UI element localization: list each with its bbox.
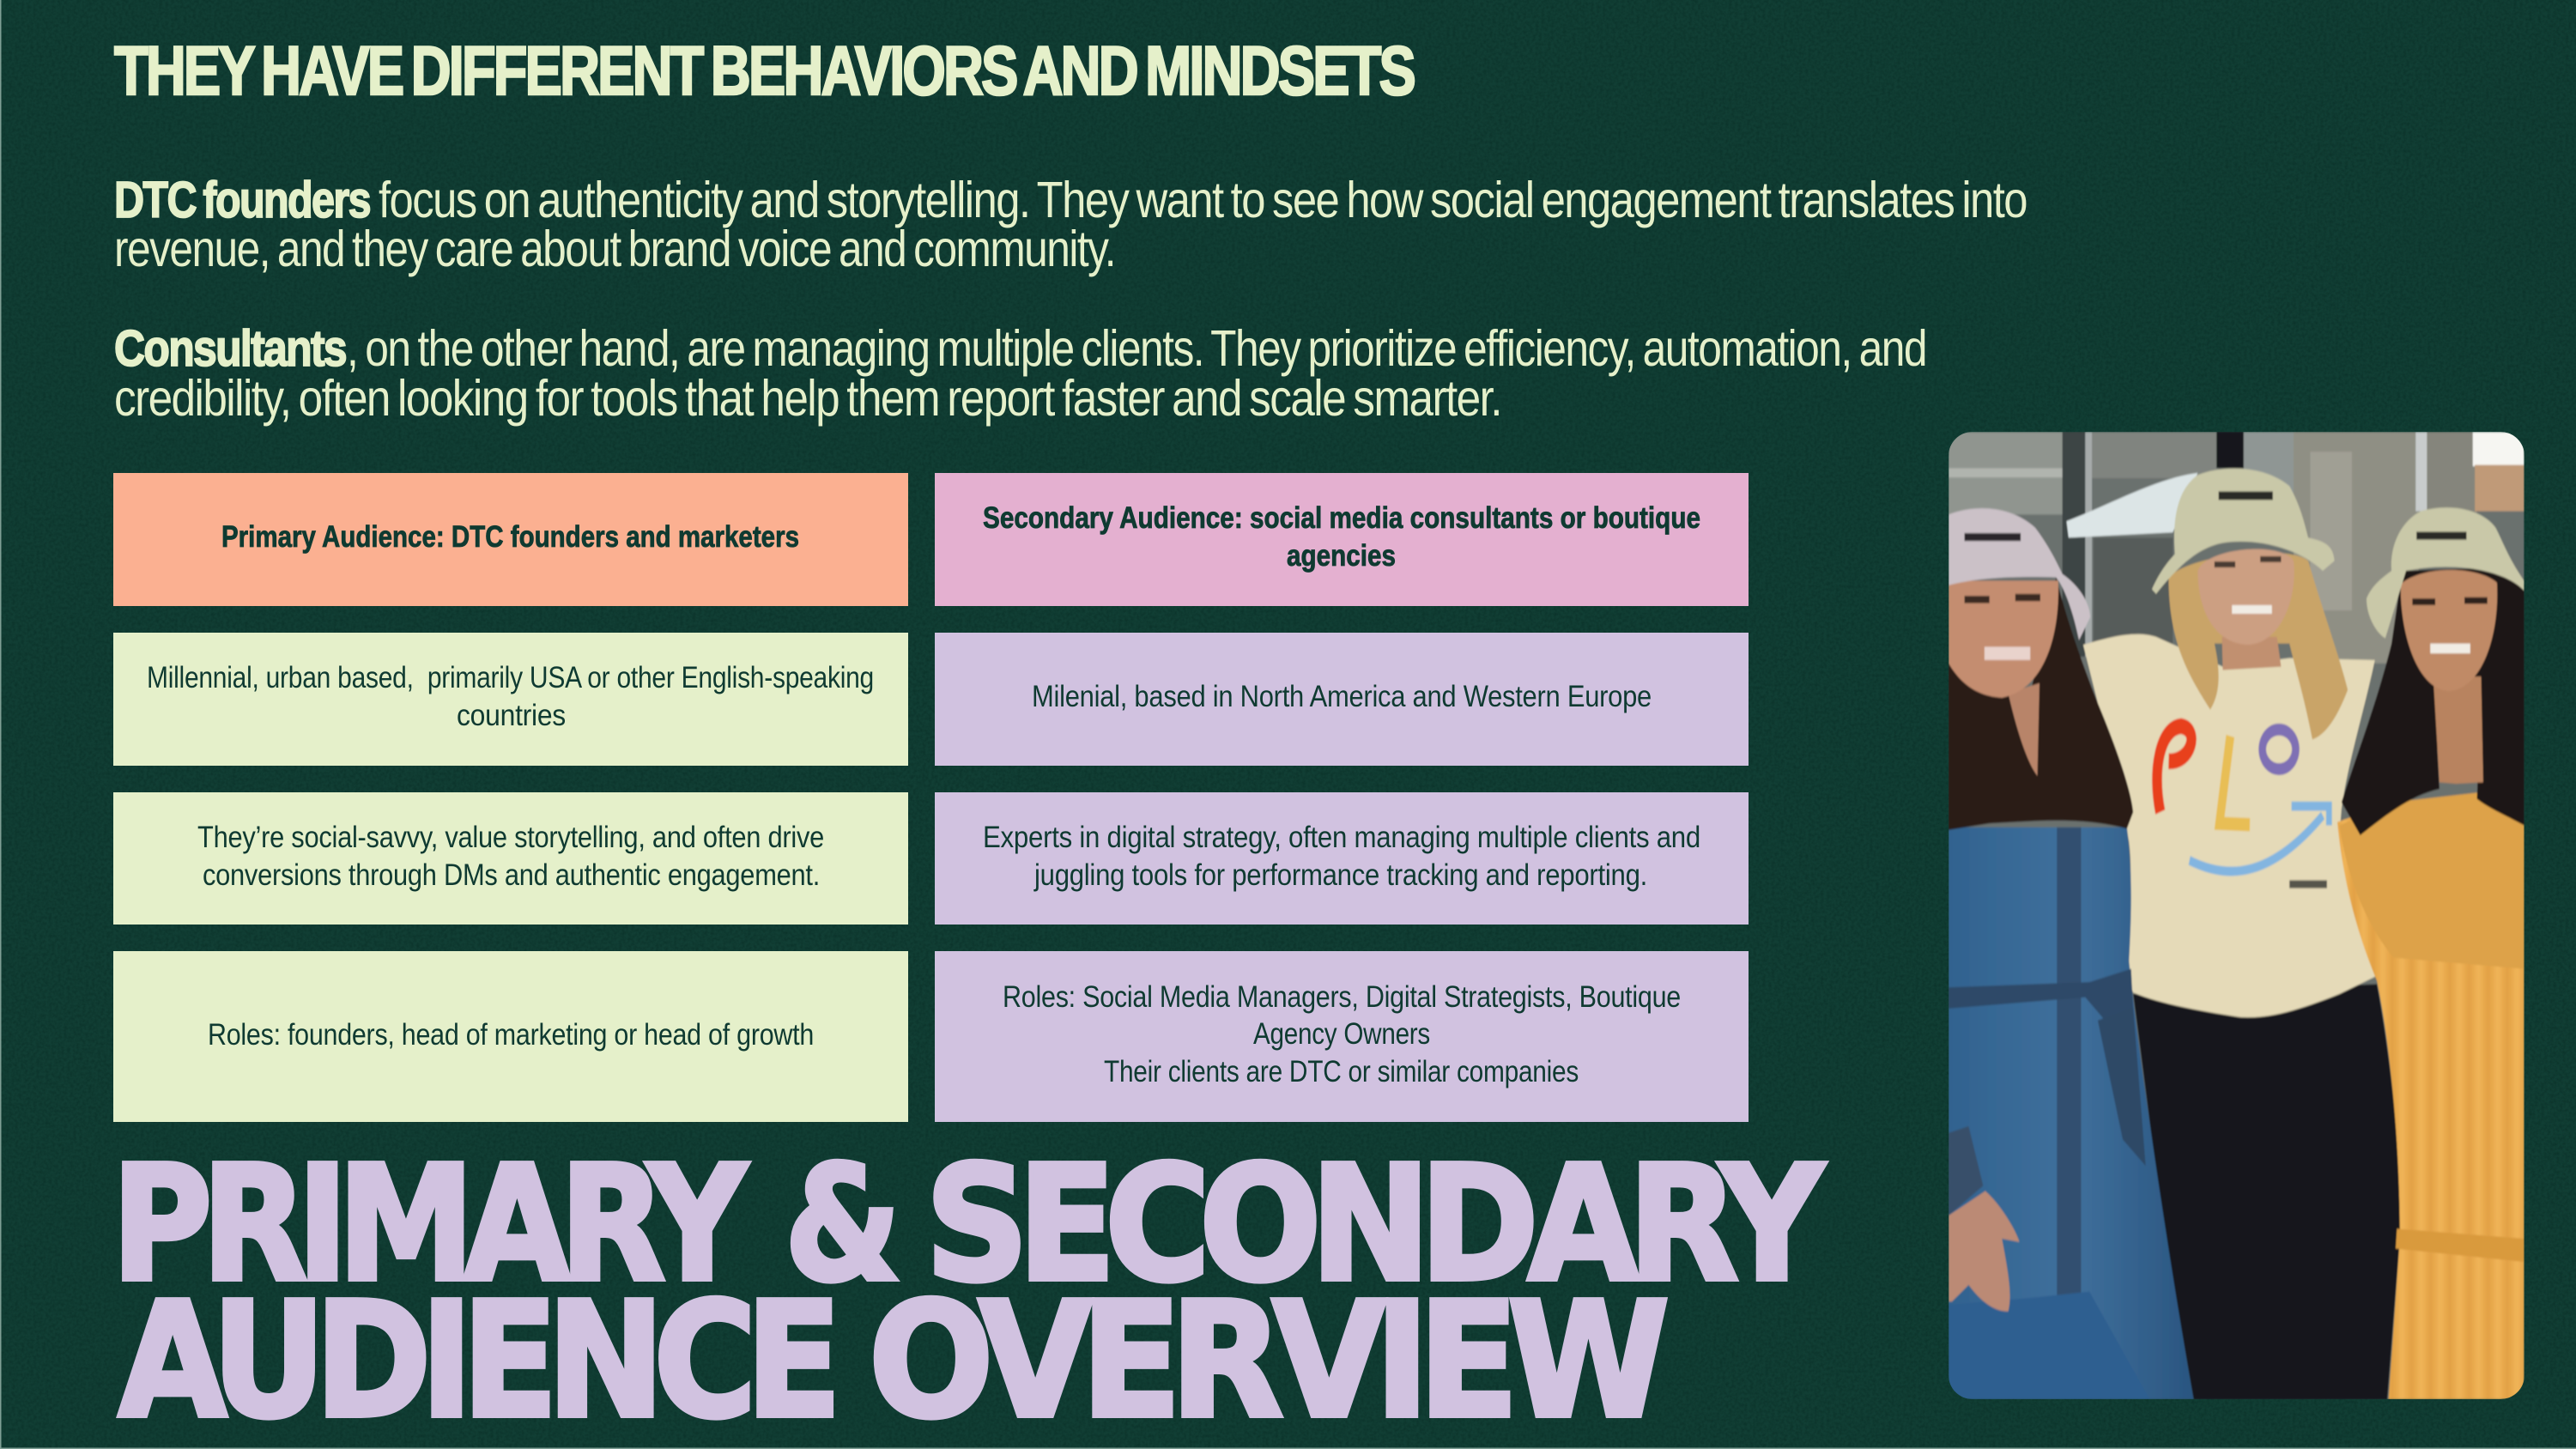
panel: secondary audience header <box>935 473 1749 606</box>
panel: primary behaviors: They’re social-savvy, value storytelling, and often drive <box>197 821 824 854</box>
backdrop <box>1949 432 2524 1399</box>
panel: secondary roles: Roles: Social Media Managers, Digital Strategists, Boutique <box>1003 980 1681 1014</box>
left woman dress <box>1949 828 2194 1399</box>
panel: primary audience header <box>113 473 908 606</box>
text block: consultants: credibility, often looking for tools that help them report faster and scale smarter. <box>114 370 1501 427</box>
right woman hat <box>2367 507 2524 638</box>
panel: secondary roles: Their clients are DTC or similar companies <box>1104 1055 1579 1088</box>
right woman face <box>2401 570 2497 691</box>
heading: behaviors and mindsets: THEY HAVE DIFFERENT BEHAVIORS AND MINDSETS <box>114 33 1414 110</box>
left woman hand <box>1949 1191 2020 1312</box>
text block: DTC founders: focus on authenticity and storytelling. They want to see how social engagement translates into <box>379 172 2027 228</box>
center woman hat <box>2152 469 2335 594</box>
panel: secondary demographics <box>935 633 1749 766</box>
panel: primary audience header: Primary Audience: DTC founders and marketers <box>221 520 799 554</box>
panel: primary demographics <box>113 633 908 766</box>
panel: primary behaviors <box>113 792 908 925</box>
panel: secondary audience header: Secondary Audience: social media consultants or boutique <box>983 501 1700 535</box>
panel: secondary roles <box>935 951 1749 1122</box>
center woman hair and face <box>2168 553 2348 739</box>
left woman hat <box>1949 508 2090 640</box>
title: primary and secondary audience overview: PRIMARY <box>112 1131 749 1317</box>
title: primary and secondary audience overview: SECONDARY <box>925 1131 1825 1317</box>
text block: consultants: Consultants <box>114 320 346 377</box>
panel: secondary behaviors <box>935 792 1749 925</box>
left woman hair <box>1949 578 2133 830</box>
title: primary and secondary audience overview <box>112 1131 1825 1449</box>
text block: consultants: , on the other hand, are managing multiple clients. They prioritize efficiency, automation, and <box>347 320 1926 377</box>
panel: secondary behaviors: Experts in digital strategy, often managing multiple clients and <box>983 821 1700 854</box>
panel: primary demographics: Millennial, urban based, primarily USA or other English-speaking <box>147 661 874 694</box>
panel: primary roles <box>113 951 908 1122</box>
panel: secondary demographics: Milenial, based in North America and Western Europe <box>1032 680 1652 713</box>
title: primary and secondary audience overview: OVERVIEW <box>869 1268 1665 1449</box>
right woman dress <box>2337 792 2524 1399</box>
text block: DTC founders: revenue, and they care about brand voice and community. <box>114 221 1115 277</box>
panel: secondary audience header: agencies <box>1287 539 1396 573</box>
panel: primary demographics: countries <box>457 699 566 732</box>
right woman hair <box>2342 567 2524 835</box>
photo: three women in bucket hats <box>1949 432 2524 1399</box>
title: primary and secondary audience overview: & <box>785 1131 896 1317</box>
center woman pants <box>2133 984 2400 1399</box>
text block: DTC founders: DTC founders <box>114 172 370 228</box>
text block: consultants <box>114 320 1926 427</box>
title: primary and secondary audience overview: AUDIENCE <box>118 1268 832 1449</box>
panel: primary roles: Roles: founders, head of marketing or head of growth <box>208 1018 814 1052</box>
shirt lettering <box>2157 726 2191 812</box>
text block: DTC founders <box>114 172 2027 277</box>
left woman face <box>1949 580 2058 698</box>
center woman shirt <box>2083 634 2380 1017</box>
panel: secondary behaviors: juggling tools for performance tracking and reporting. <box>1033 858 1647 892</box>
panel: secondary roles: Agency Owners <box>1253 1017 1430 1051</box>
panel: primary behaviors: conversions through DMs and authentic engagement. <box>203 858 820 892</box>
